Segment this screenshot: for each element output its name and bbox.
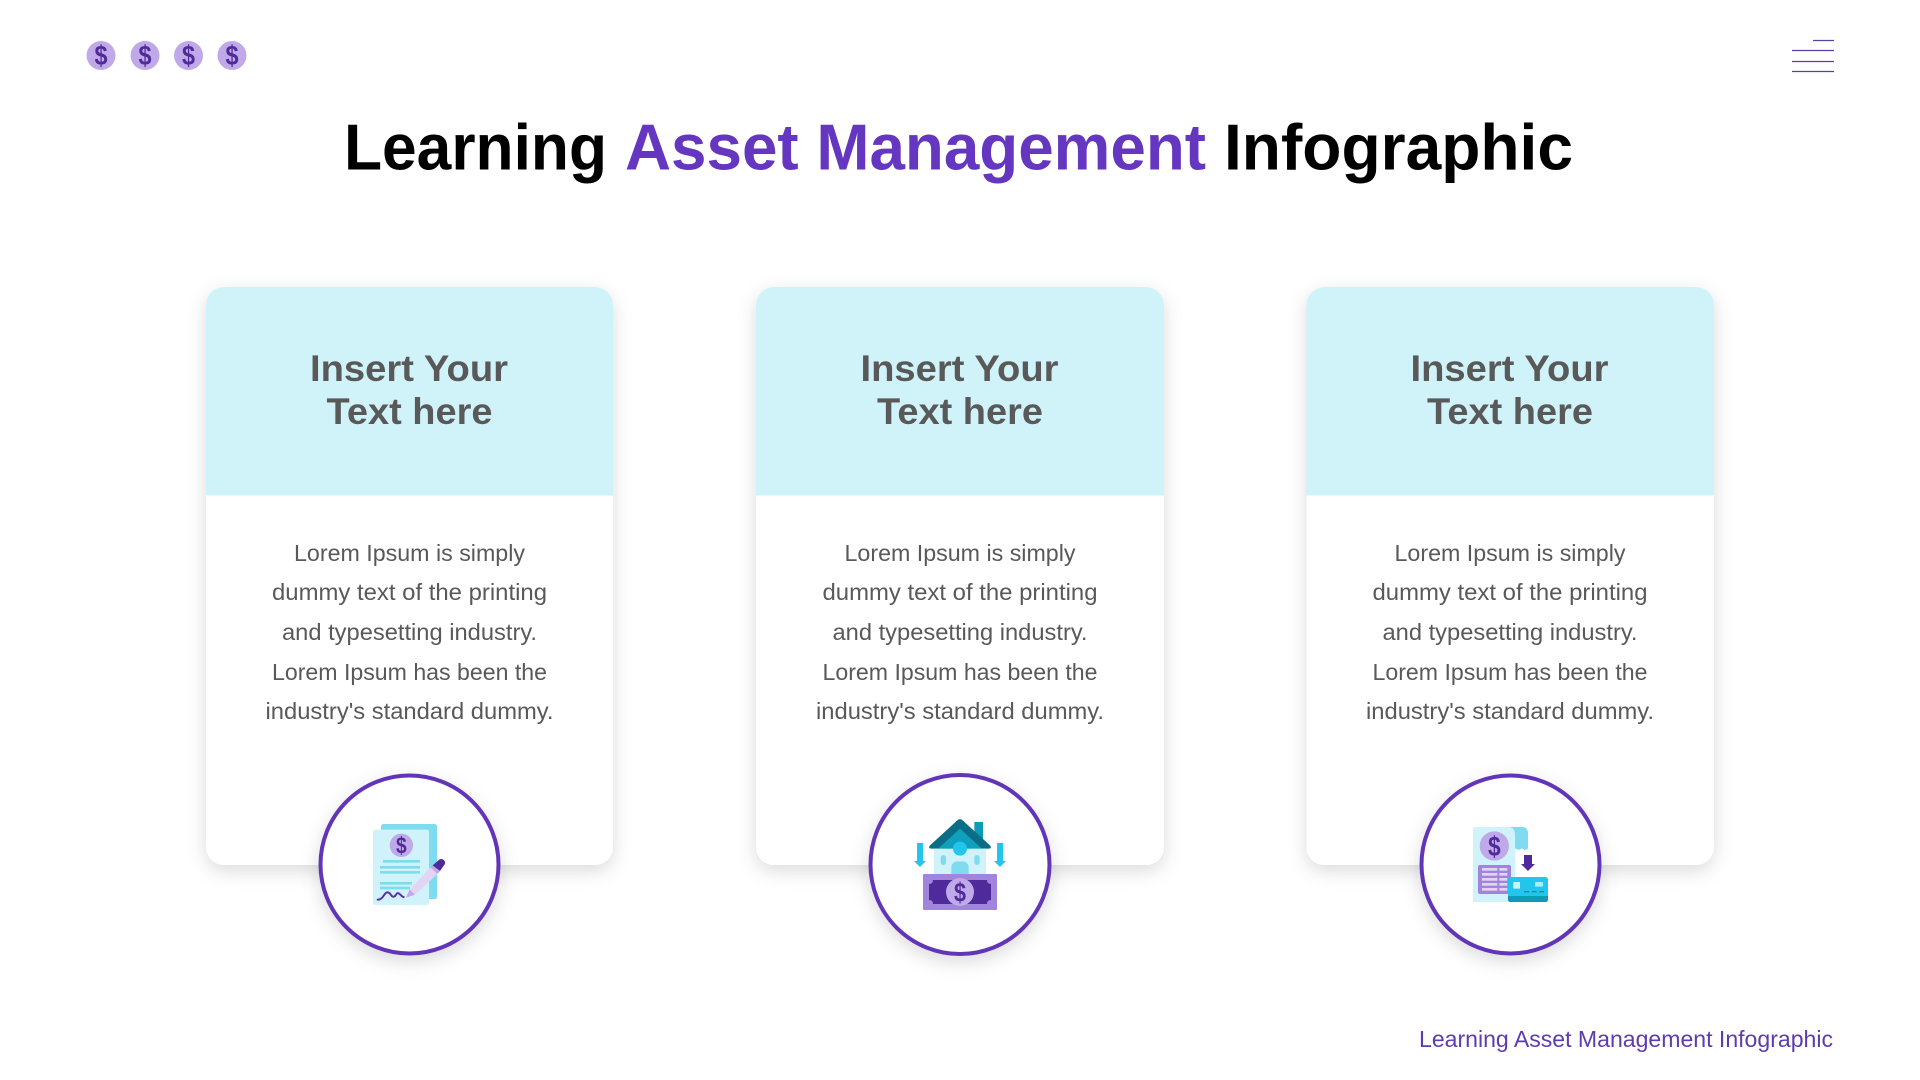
icon row: dollar coins: [86, 40, 246, 71]
card background: [756, 287, 1164, 865]
body text: and typesetting industry.: [1382, 619, 1638, 645]
icon circle: [870, 775, 1050, 954]
body text: industry's standard dummy.: [816, 698, 1104, 724]
body text: Lorem Ipsum has been the: [1372, 659, 1648, 685]
body text: industry's standard dummy.: [266, 698, 554, 724]
heading: Text here: [326, 391, 492, 432]
icon: coin 4: [218, 40, 246, 71]
icon circle: [1422, 776, 1600, 954]
icon: house and banknote: $: [954, 878, 966, 908]
heading: [860, 348, 1058, 432]
body text: [816, 540, 1104, 724]
body text: dummy text of the printing: [822, 579, 1098, 605]
body text: Lorem Ipsum has been the: [822, 659, 1098, 685]
title: Infographic: [1224, 110, 1573, 184]
body text: Lorem Ipsum is simply: [294, 540, 525, 566]
icon: contract with pen: [373, 824, 445, 905]
body text: and typesetting industry.: [282, 619, 537, 645]
body text: and typesetting industry.: [832, 619, 1088, 645]
panel: card 3: [1306, 287, 1714, 954]
heading: [310, 348, 508, 432]
icon: coin 1: $: [94, 40, 108, 71]
heading: Insert Your: [310, 348, 508, 389]
icon: coin 3: [174, 40, 203, 71]
body text: Lorem Ipsum is simply: [844, 540, 1076, 566]
icon: contract with pen: $: [396, 833, 407, 859]
title: [344, 110, 1573, 184]
body text: [266, 540, 554, 724]
body text: Lorem Ipsum has been the: [272, 659, 547, 685]
icon: receipt and credit card: $: [1488, 831, 1501, 862]
icon: coin 4: $: [226, 40, 239, 71]
icon circle: [320, 776, 498, 954]
heading: [1410, 348, 1608, 432]
card header: [206, 287, 613, 496]
card header: [756, 287, 1164, 496]
icon: coin 3: $: [182, 40, 195, 71]
panel: card 1: [206, 287, 613, 954]
icon: coin 2: [130, 40, 160, 71]
icon: coin 1: [86, 40, 116, 71]
heading: Insert Your: [1410, 348, 1608, 389]
icon: receipt and credit card: [1473, 827, 1548, 902]
footer text: Learning Asset Management Infographic: [1419, 1026, 1833, 1052]
card background: [206, 287, 613, 865]
body text: dummy text of the printing: [1372, 579, 1648, 605]
body text: [1366, 540, 1654, 724]
title: Asset Management: [625, 110, 1206, 184]
body text: industry's standard dummy.: [1366, 698, 1654, 724]
body text: dummy text of the printing: [272, 579, 547, 605]
heading: Text here: [1427, 391, 1593, 432]
panel: card 2: [756, 287, 1164, 954]
title: Learning: [344, 110, 607, 184]
icon: house and banknote: [914, 819, 1006, 910]
card header: [1306, 287, 1714, 496]
card background: [1306, 287, 1714, 865]
icon: menu lines: [1792, 40, 1834, 72]
heading: Insert Your: [860, 348, 1058, 389]
icon: coin 2: $: [138, 40, 152, 71]
heading: Text here: [877, 391, 1043, 432]
body text: Lorem Ipsum is simply: [1394, 540, 1626, 566]
